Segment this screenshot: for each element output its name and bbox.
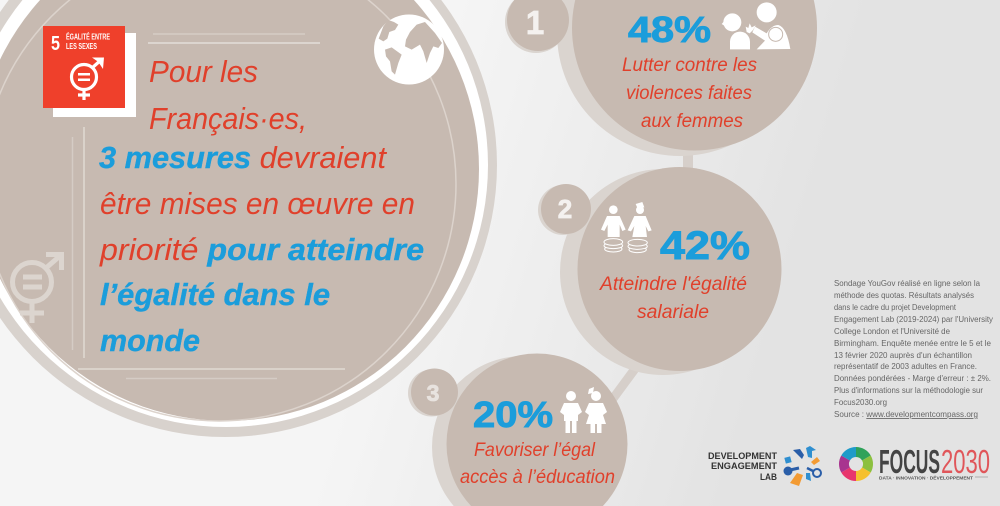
panel: measure 3 (408, 354, 628, 506)
label: measure 1 text (622, 54, 757, 132)
heading: headline text: être mises en œuvre en (100, 186, 415, 221)
logo: Development Engagement Lab (708, 446, 821, 486)
icon: violence, two figures (722, 2, 790, 49)
icon: globe (374, 14, 444, 84)
heading: headline text (99, 54, 424, 358)
heading: headline text: monde (100, 323, 200, 358)
text block: methodology note: dans le cadre du projet Development (834, 302, 957, 312)
connector: circle 2 to circle 3 (612, 362, 640, 400)
badge: number 3: 3 (427, 380, 439, 406)
icon: boy and girl pupils (560, 387, 607, 433)
label: measure 3 text: Favoriser l’égal (474, 439, 596, 461)
badge: number 2 (538, 184, 591, 235)
label: measure 3 text: accès à l’éducation (460, 466, 615, 488)
text block: methodology note: Focus2030.org (834, 397, 887, 407)
panel: measure 2 (538, 167, 782, 375)
text block: methodology note: méthode des quotas. Résultats analysés (834, 290, 974, 300)
icon: man and woman on coin stacks (601, 202, 652, 253)
text block: methodology note (834, 278, 994, 419)
text block: methodology note: Données pondérées - Marge d'erreur : ± 2%. (834, 373, 991, 383)
icon: SDG 5 gender equality goal square: 5 (51, 33, 60, 55)
text block: methodology note: College London et l'Université de (834, 326, 950, 336)
text block: methodology note: 13 février 2020 auprès d'un échantillon (834, 350, 972, 360)
label: measure 3 text (460, 439, 615, 488)
stat: 48%: 48% (628, 9, 711, 50)
icon: faint gender symbol (12, 254, 62, 323)
heading: headline text: l’égalité dans le (100, 277, 330, 312)
badge: number 2: 2 (558, 194, 572, 224)
text block: methodology note: Birmingham. Enquête menée entre le 5 et le (834, 338, 991, 348)
label: measure 2 text: Atteindre l'égalité (599, 273, 747, 295)
heading: headline text: 3 mesures devraient (99, 140, 387, 175)
heading: headline text: Français·es, (149, 101, 307, 136)
badge: number 3 (408, 368, 458, 416)
stat: 42%: 42% (660, 224, 750, 268)
badge: number 1: 1 (526, 4, 544, 41)
panel: measure 1 (505, 0, 817, 156)
stat: 20%: 20% (473, 394, 553, 435)
text block: methodology note: représentatif de 2003 adultes en France. (834, 361, 977, 371)
icon: SDG 5 gender equality goal square: LES SEXES (66, 42, 97, 51)
logo: Development Engagement Lab: DEVELOPMENT (708, 451, 777, 461)
badge: number 1 (505, 0, 569, 53)
icon: SDG 5 gender equality goal square: ÉGALITÉ ENTRE (66, 32, 110, 42)
text block: methodology note: Sondage YouGov réalisé en ligne selon la (834, 278, 980, 288)
label: measure 1 text: Lutter contre les (622, 54, 757, 76)
text block: methodology note: Source : www.developmentcompass.org (834, 409, 978, 419)
heading: headline text: Pour les (149, 54, 258, 89)
label: measure 2 text: salariale (637, 301, 709, 323)
logo: Focus 2030: FOCUS (879, 443, 940, 480)
logo: Development Engagement Lab: LAB (760, 472, 777, 482)
logo: Focus 2030: DATA · INNOVATION · DÉVELOPPEMENT (879, 474, 973, 480)
icon: SDG 5 gender equality goal square (43, 26, 136, 117)
logo: Development Engagement Lab: ENGAGEMENT (711, 461, 778, 471)
label: measure 1 text: violences faites (626, 82, 752, 104)
connector: circle 1 to circle 2 (683, 145, 693, 175)
label: measure 1 text: aux femmes (641, 110, 743, 132)
panel: large headline circle (0, 0, 497, 437)
text block: methodology note: Plus d'informations sur la méthodologie sur (834, 385, 983, 395)
label: measure 2 text (599, 273, 747, 323)
heading: headline text: priorité pour atteindre (99, 232, 424, 267)
